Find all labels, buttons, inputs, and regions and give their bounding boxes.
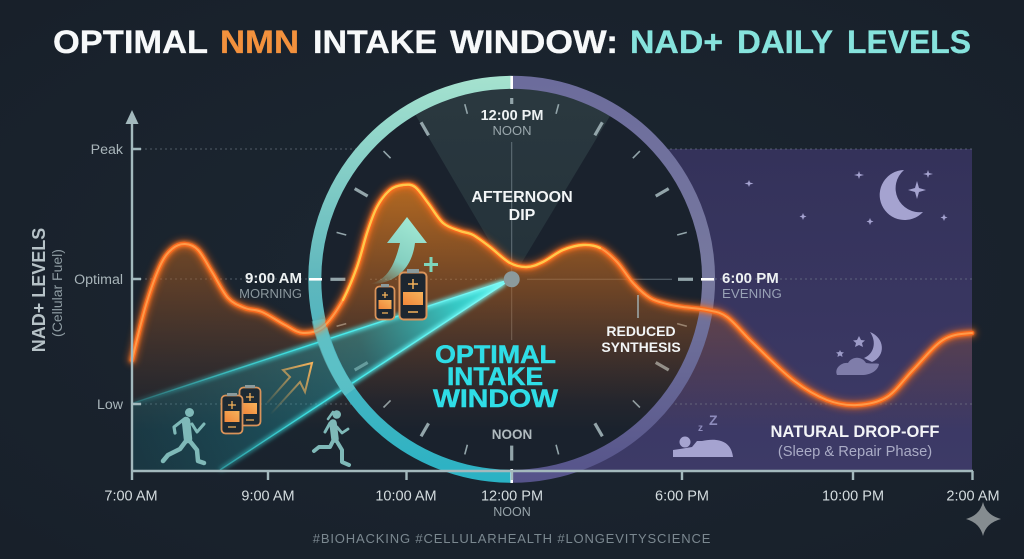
- clock label: 9 am morning: 9:00 AM: [245, 270, 302, 287]
- panel: night drop-off phase: [512, 149, 972, 470]
- x-axis labels: 7:00 AM: [104, 488, 158, 504]
- title: NMN: [220, 24, 299, 60]
- NAD+ level curve: [132, 185, 972, 405]
- y-axis title: [29, 228, 65, 352]
- area under NAD+ curve: [133, 186, 972, 408]
- clock label: 9 am morning: MORNING: [239, 286, 302, 301]
- label: optimal intake window: INTAKE: [447, 363, 543, 391]
- clock hub: [504, 271, 520, 287]
- label: reduced synthesis: SYNTHESIS: [601, 339, 681, 355]
- title: WINDOW:: [450, 24, 618, 60]
- label: afternoon dip: DIP: [509, 207, 536, 224]
- clock ring: [315, 82, 709, 476]
- title: DAILY: [737, 24, 833, 60]
- clock label: 12 pm noon: [481, 108, 543, 138]
- clock label: 12 pm noon: NOON: [492, 123, 532, 138]
- x-axis labels: [104, 488, 1000, 519]
- label: reduced synthesis: REDUCED: [606, 323, 676, 339]
- x-axis labels: 12:00 PM: [481, 488, 543, 504]
- label: optimal intake window: OPTIMAL: [435, 341, 556, 369]
- icon: rising arrow: [370, 217, 438, 284]
- clock label: bottom noon: NOON: [492, 427, 532, 442]
- label: afternoon dip: [471, 189, 573, 224]
- icon: cloud moon: [836, 332, 882, 375]
- label: natural drop-off: (Sleep & Repair Phase): [778, 444, 932, 460]
- ring overlay where curve and beam pass beneath: [318, 320, 350, 392]
- label: natural drop-off: NATURAL DROP-OFF: [771, 423, 939, 441]
- hashtags: #BIOHACKING #CELLULARHEALTH #LONGEVITYSCIENCE: [313, 531, 711, 546]
- x-axis labels: 9:00 AM: [241, 488, 295, 504]
- title: NAD+: [630, 24, 723, 60]
- y-axis title: NAD+ LEVELS: [29, 228, 49, 352]
- clock label: 6 pm evening: [722, 270, 782, 301]
- label: natural drop-off: [771, 423, 939, 460]
- icon: runner two: [314, 410, 349, 465]
- icon: outlined trend arrow: [267, 363, 312, 415]
- y-axis labels: Peak: [91, 142, 124, 158]
- label: afternoon dip: AFTERNOON: [471, 189, 573, 206]
- clock tick marks: [330, 98, 693, 461]
- icon: batteries in beam: [222, 385, 260, 434]
- clock label: 6 pm evening: EVENING: [722, 286, 782, 301]
- title: INTAKE: [313, 24, 437, 60]
- icon: sleeping person: z: [698, 423, 703, 434]
- icon: batteries in clock: [376, 269, 426, 320]
- clock label: 12 pm noon: 12:00 PM: [481, 108, 543, 124]
- label: reduced synthesis: [601, 295, 681, 355]
- title: [53, 24, 971, 60]
- optimal intake beam: [132, 279, 512, 470]
- icon: runner one: [163, 408, 204, 463]
- gridlines: peak optimal low: [140, 149, 972, 404]
- y-axis title: (Cellular Fuel): [49, 249, 65, 337]
- icon: sleeping person: [673, 412, 733, 457]
- title: LEVELS: [847, 24, 971, 60]
- x-axis labels: 10:00 PM: [822, 488, 884, 504]
- clock label: 9 am morning: [239, 270, 302, 301]
- y-axis labels: Optimal: [74, 272, 123, 288]
- axes: [126, 110, 973, 480]
- clock label: 6 pm evening: 6:00 PM: [722, 270, 779, 287]
- x-axis labels: 10:00 AM: [375, 488, 437, 504]
- clock face: [315, 82, 709, 476]
- ring cardinal marks: [309, 76, 714, 483]
- icon: corner sparkle: [966, 502, 1001, 536]
- x-axis labels: 2:00 AM: [946, 488, 1000, 504]
- icon: crescent moon and stars: [744, 170, 948, 225]
- icon: sleeping person: Z: [709, 412, 718, 428]
- y-axis labels: Low: [97, 397, 124, 413]
- afternoon dip wedge: [415, 88, 610, 279]
- label: optimal intake window: [433, 341, 558, 413]
- label: optimal intake window: WINDOW: [433, 385, 558, 413]
- title: OPTIMAL: [53, 24, 208, 60]
- x-axis labels: NOON: [493, 505, 531, 519]
- y-axis labels: [74, 142, 124, 413]
- clock crosshair lines: [370, 142, 672, 340]
- x-axis labels: 6:00 PM: [655, 488, 709, 504]
